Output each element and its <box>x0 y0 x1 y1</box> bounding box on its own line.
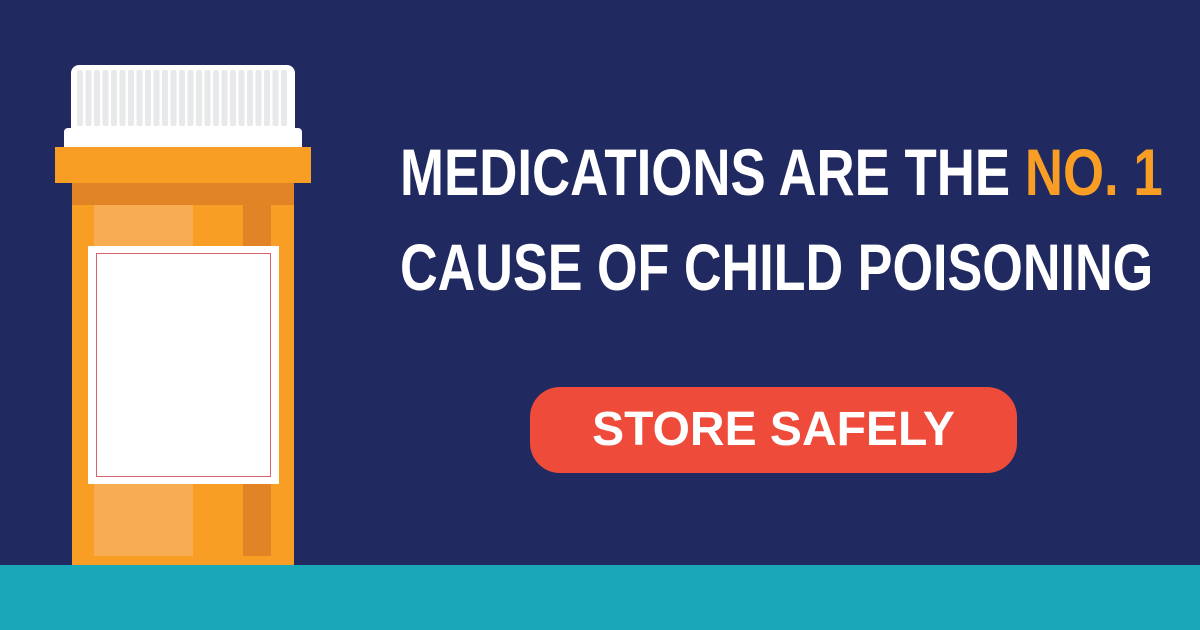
ground strip <box>0 565 1200 630</box>
title: CAUSE OF CHILD POISONING <box>400 230 1153 304</box>
cap base <box>64 128 302 147</box>
title: MEDICATIONS ARE THE NO. 1 <box>400 135 1163 209</box>
button: store safely: STORE SAFELY <box>592 403 955 456</box>
button: store safely <box>530 387 1017 473</box>
icon: pill bottle <box>55 65 311 565</box>
bottle cap <box>71 65 295 128</box>
label <box>88 246 279 484</box>
orange neck ring <box>55 147 311 183</box>
title <box>400 135 1163 304</box>
bottle body <box>72 183 294 565</box>
